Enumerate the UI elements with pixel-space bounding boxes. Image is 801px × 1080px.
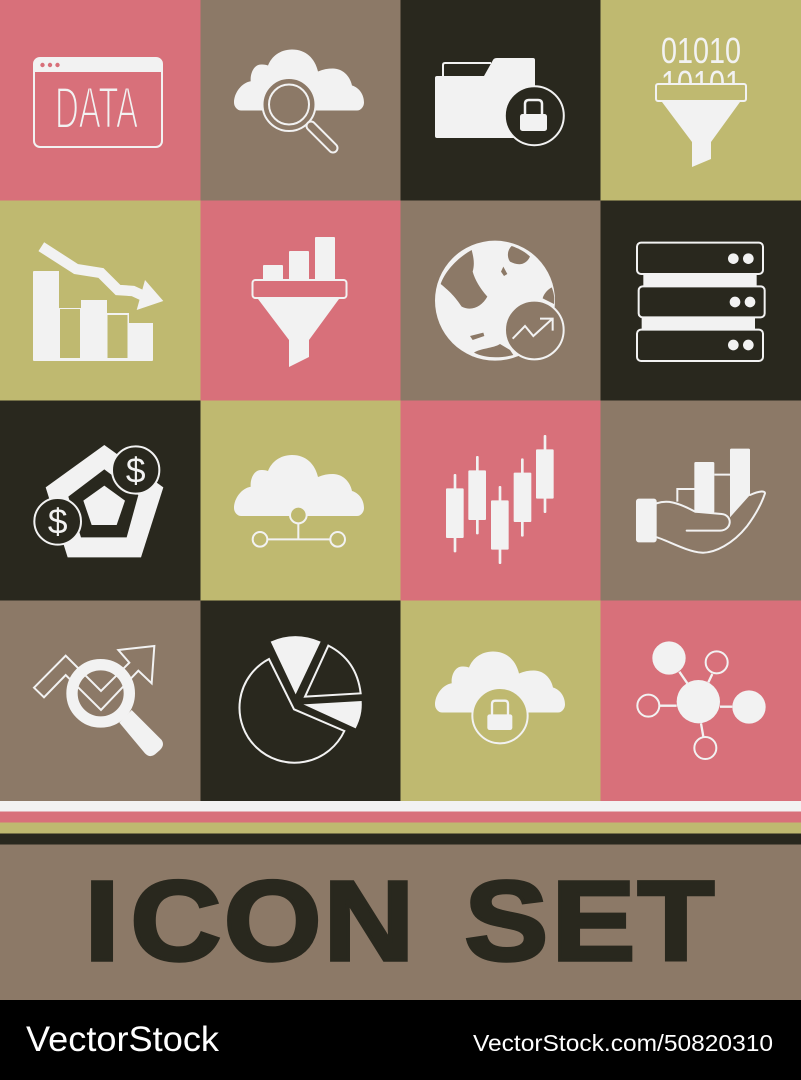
cell: server stack	[600, 200, 801, 400]
footer url: VectorStock.com/50820310	[473, 1030, 773, 1056]
cell: binary data funnel: 10101	[661, 63, 741, 104]
cell: binary data funnel	[600, 0, 801, 200]
cell: locked folder	[400, 0, 600, 200]
cell: cloud with magnifier	[200, 0, 400, 200]
title banner background	[0, 844, 801, 1000]
cell: data browser window	[0, 0, 200, 200]
cell: falling bar chart	[0, 200, 200, 400]
cell: hand holding bar chart	[600, 400, 801, 600]
cell: cloud network	[200, 400, 400, 600]
cell: pentagon with dollar coins: $	[126, 451, 146, 490]
cell: binary data funnel: 01010	[661, 30, 741, 71]
cell: globe with growth badge	[400, 200, 600, 400]
cell: bar chart funnel	[200, 200, 400, 400]
cell: network nodes	[600, 600, 801, 801]
cell: pentagon with dollar coins	[0, 400, 200, 600]
cell: pentagon with dollar coins: $	[48, 503, 68, 542]
title: ICON SET	[85, 859, 714, 985]
cell: candlestick chart	[400, 400, 600, 600]
cell: magnifier over trend arrow	[0, 600, 200, 801]
cell: cloud with padlock	[400, 600, 600, 801]
footer brand: VectorStock	[26, 1020, 220, 1059]
cell: exploded pie chart	[200, 600, 400, 801]
footer bar	[0, 1000, 801, 1080]
cell: data browser window: DATA	[55, 76, 138, 141]
colour stripes	[0, 801, 801, 844]
